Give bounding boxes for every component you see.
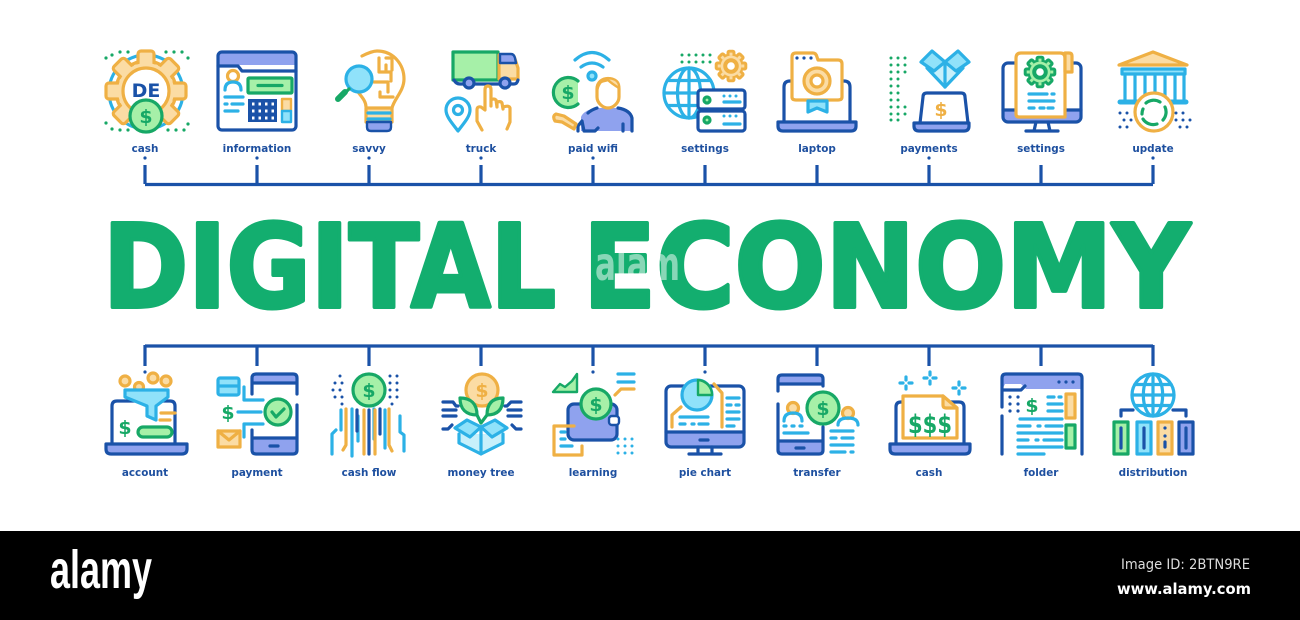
icon: laptop certificate bbox=[778, 53, 856, 131]
image id: Image ID: 2BTN9RE bbox=[1121, 557, 1250, 573]
label: settings (top, sixth): settings bbox=[681, 143, 729, 155]
label: payment: payment bbox=[231, 467, 283, 479]
website: www.alamy.com bbox=[1117, 580, 1251, 598]
top connector bbox=[145, 158, 1153, 184]
icon: cash laptop: $$$ bbox=[908, 410, 952, 440]
label: update: update bbox=[1132, 143, 1174, 155]
label: pie chart: pie chart bbox=[679, 467, 731, 479]
label: cash (bottom): cash bbox=[916, 467, 942, 479]
icon: cash flow: $ bbox=[362, 380, 376, 402]
icon: settings monitor document bbox=[1003, 53, 1081, 131]
label: distribution: distribution bbox=[1119, 467, 1187, 479]
label: cash flow: cash flow bbox=[342, 467, 397, 479]
icon: payment phone bbox=[218, 374, 297, 454]
icon: cash gear: $ bbox=[139, 106, 153, 128]
icon: payments box laptop bbox=[891, 51, 969, 131]
icon: transfer phone: $ bbox=[816, 398, 830, 420]
icon: paid wifi: $ bbox=[561, 82, 575, 104]
icon: folder window: $ bbox=[1025, 395, 1039, 417]
title: ECONOMY bbox=[583, 201, 1192, 335]
label: money tree: money tree bbox=[448, 467, 514, 479]
icon: payment phone: $ bbox=[221, 402, 235, 424]
alamy logo: alamy bbox=[50, 540, 152, 600]
watermark on title: alam bbox=[595, 237, 680, 291]
label: transfer: transfer bbox=[793, 467, 842, 479]
icon: cash gear: DE bbox=[132, 80, 160, 102]
icon: settings server bbox=[664, 51, 746, 131]
footer bar bbox=[0, 531, 1300, 620]
label: paid wifi: paid wifi bbox=[568, 143, 618, 155]
label: truck: truck bbox=[466, 143, 497, 155]
icon: cash gear bbox=[106, 51, 188, 132]
label: information: information bbox=[223, 143, 291, 155]
icon: transfer phone bbox=[778, 375, 858, 454]
icon: money tree bbox=[443, 374, 521, 454]
icon: pie chart monitor bbox=[666, 380, 744, 454]
icon: payments box laptop: $ bbox=[934, 99, 948, 121]
icon: account laptop funnel bbox=[106, 373, 187, 454]
icon: account laptop funnel: $ bbox=[118, 417, 132, 439]
title bbox=[103, 201, 1192, 335]
icon: folder window bbox=[1002, 374, 1083, 454]
icon: learning wallet: $ bbox=[589, 394, 603, 416]
icon: learning wallet bbox=[553, 374, 634, 455]
icon: cash laptop bbox=[890, 372, 970, 454]
icon: truck bbox=[446, 52, 518, 131]
label: payments: payments bbox=[900, 143, 958, 155]
label: cash: cash bbox=[132, 143, 158, 155]
label: folder: folder bbox=[1024, 467, 1059, 479]
bottom connector bbox=[145, 345, 1153, 372]
label: learning: learning bbox=[569, 467, 617, 479]
icon: cash flow bbox=[332, 374, 404, 456]
icon: money tree: $ bbox=[475, 380, 489, 402]
label: account: account bbox=[122, 467, 168, 479]
title: DIGITAL bbox=[103, 201, 556, 335]
icon: savvy bulb bbox=[338, 51, 404, 131]
icon: information window bbox=[218, 52, 296, 130]
label: settings (top, ninth): settings bbox=[1017, 143, 1065, 155]
icon: paid wifi bbox=[553, 52, 632, 131]
label: laptop: laptop bbox=[798, 143, 836, 155]
icon: distribution globe bbox=[1114, 374, 1193, 454]
label: savvy: savvy bbox=[352, 143, 386, 155]
icon: update bank bbox=[1119, 52, 1194, 131]
